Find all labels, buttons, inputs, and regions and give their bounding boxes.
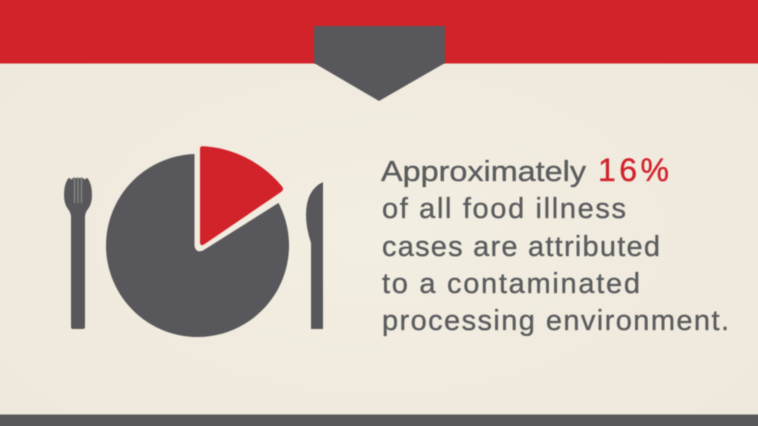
- pie highlighted slice 16%: [200, 146, 283, 245]
- text block: statistic: Approximately: [381, 156, 587, 188]
- highlighted number: 16%: [598, 152, 669, 188]
- downward arrow banner: [314, 26, 445, 101]
- top red band: [0, 0, 758, 64]
- pie remainder: [106, 154, 289, 337]
- text block: statistic: of all food illness: [382, 193, 626, 225]
- text block: statistic: processing environment.: [382, 305, 729, 337]
- icon: knife: [306, 182, 323, 329]
- text block: statistic: cases are attributed: [382, 231, 660, 263]
- bottom dark bar: [0, 414, 758, 426]
- icon: fork: [64, 177, 92, 329]
- text block: statistic: [381, 152, 729, 337]
- text block: statistic: to a contaminated: [382, 268, 640, 300]
- chart: plate pie: [106, 146, 289, 337]
